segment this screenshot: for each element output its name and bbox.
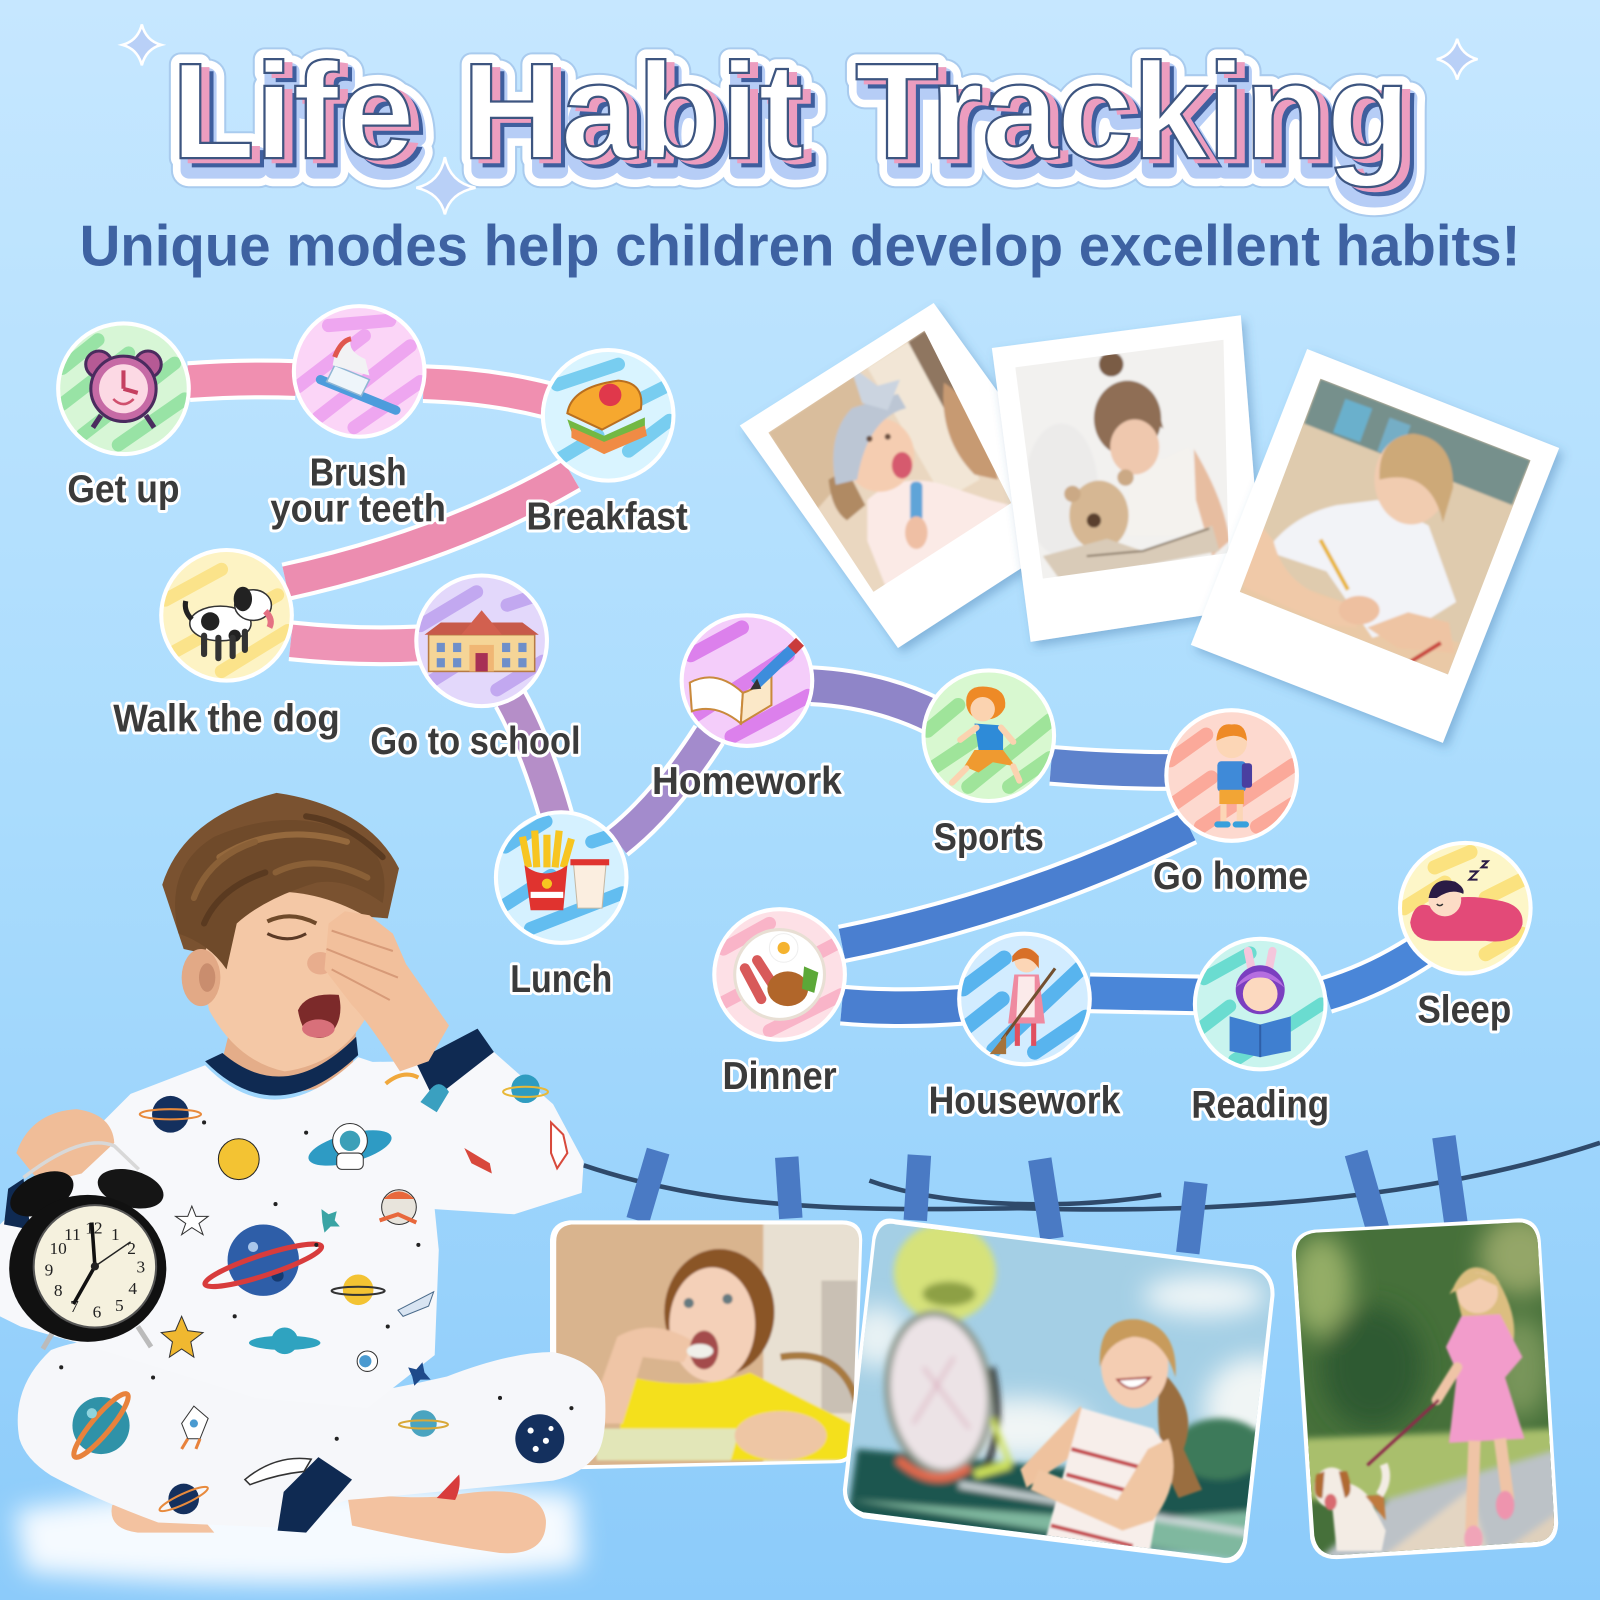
icon: school building: [424, 610, 539, 671]
title: Life: [171, 34, 415, 187]
bed mattress glow: [15, 1485, 582, 1583]
title: Tracking: [863, 46, 1417, 199]
title: Life: [171, 34, 415, 187]
feet: [112, 1491, 546, 1553]
step labels: Breakfast: [527, 496, 688, 539]
alarm clock: 10: [49, 1239, 67, 1258]
alarm clock: 6: [93, 1302, 102, 1321]
title: Life: [180, 46, 423, 199]
neck: [219, 1010, 357, 1092]
step labels: Lunch: [510, 958, 612, 1001]
polaroid: girl brushing teeth: [740, 303, 1022, 654]
alarm clock: 12: [85, 1219, 103, 1238]
icon: toothbrush: [320, 339, 396, 410]
title: Life: [184, 42, 427, 195]
step labels: your teeth: [270, 487, 446, 530]
icon: sleeping child: [1410, 861, 1523, 941]
hand holding clock: [16, 1109, 114, 1184]
title: Tracking: [855, 34, 1409, 187]
route connectors: [189, 379, 1423, 1008]
title: Life: [180, 38, 423, 191]
icon: alarm clock: [86, 351, 161, 428]
icon: open book and pencil: [690, 642, 800, 723]
icon: boy with backpack: [1216, 724, 1252, 824]
step labels: Sleep: [1417, 988, 1511, 1031]
title: Life: [180, 46, 423, 199]
step labels: Dinner: [722, 1055, 837, 1098]
icon: plate of food: [735, 930, 824, 1019]
node: Brush your teeth: [292, 304, 427, 439]
alarm clock: 8: [54, 1281, 62, 1300]
pajama top: [0, 1057, 439, 1408]
hanging photo: girl playing tennis: [842, 1218, 1274, 1564]
step labels: Walk the dog: [113, 698, 340, 741]
node: Homework: [680, 613, 814, 748]
icon: running boy: [952, 687, 1019, 783]
polaroid: girl reading with teddy: [992, 315, 1264, 642]
icon: child reading: [1230, 951, 1291, 1057]
title: Tracking: [863, 46, 1417, 199]
title: Tracking: [855, 34, 1409, 187]
title: Tracking: [863, 38, 1417, 191]
title: Life: [180, 46, 423, 199]
clothes pegs: [638, 1137, 1456, 1253]
step labels: Go to school: [370, 720, 581, 763]
title: Habit: [470, 38, 812, 191]
title: Habit: [462, 34, 804, 187]
step labels: Sports: [934, 816, 1044, 859]
title: Habit: [470, 46, 812, 199]
clothesline: [584, 1143, 1600, 1209]
step labels: Housework: [929, 1079, 1121, 1122]
alarm clock: 4: [128, 1279, 137, 1298]
step labels: Get up: [67, 468, 180, 511]
alarm clock: 5: [115, 1296, 124, 1315]
title: Habit: [462, 34, 804, 187]
title: [171, 34, 1421, 199]
face: [199, 892, 380, 1071]
boy yawning with alarm clock: [0, 793, 605, 1553]
step labels: [67, 452, 1511, 1126]
node: Sleep: [1398, 841, 1533, 976]
hand over eye: [324, 911, 449, 1071]
closed eye and nose: [267, 934, 306, 939]
hair back: [162, 793, 399, 959]
hanging photo: child eating: [550, 1219, 867, 1474]
pajama print: [59, 1074, 573, 1515]
node: Breakfast: [541, 348, 676, 483]
open mouth: [298, 994, 340, 1038]
node: Get up: [56, 321, 191, 456]
title: Tracking: [867, 42, 1421, 195]
alarm clock: [3, 1143, 168, 1349]
icon: fries and drink: [522, 831, 609, 910]
icon: dog: [185, 587, 271, 658]
alarm clock: 1: [111, 1225, 120, 1244]
alarm clock: 11: [64, 1225, 81, 1244]
step labels: Brush: [310, 452, 407, 495]
node: Sports: [921, 668, 1056, 803]
node: Reading: [1193, 937, 1328, 1071]
title: Life: [171, 34, 415, 187]
step labels: Go home: [1153, 855, 1308, 898]
title: Tracking: [855, 34, 1409, 187]
sparkle stars: [122, 24, 1478, 214]
title: Habit: [462, 34, 804, 187]
alarm clock: 3: [136, 1257, 145, 1276]
title: Habit: [470, 46, 812, 199]
subtitle: Unique modes help children develop excellent habits!: [80, 214, 1520, 278]
node: Lunch: [494, 810, 629, 945]
pajama pants: [18, 1340, 605, 1528]
alarm clock: 7: [70, 1297, 79, 1316]
node: Dinner: [712, 907, 847, 1042]
polaroid: boy writing: [1191, 349, 1559, 743]
node: Housework: [957, 932, 1092, 1066]
sleeve: [356, 1052, 584, 1214]
title: Habit: [474, 42, 816, 195]
title: Tracking: [863, 46, 1417, 199]
title: Habit: [470, 46, 812, 199]
node: Go to school: [414, 573, 549, 708]
cuff and collar: [415, 1029, 494, 1099]
icon: girl with broom: [990, 948, 1055, 1054]
alarm clock: 2: [127, 1239, 136, 1258]
node: Walk the dog: [159, 548, 294, 683]
icon: sandwich: [567, 381, 647, 454]
hanging photo: girl walking dog: [1286, 1214, 1561, 1561]
step labels: Homework: [652, 760, 842, 803]
alarm clock: 9: [45, 1261, 53, 1280]
step labels: Reading: [1191, 1083, 1329, 1126]
node: Go home: [1164, 708, 1299, 843]
hair front: [175, 820, 385, 969]
